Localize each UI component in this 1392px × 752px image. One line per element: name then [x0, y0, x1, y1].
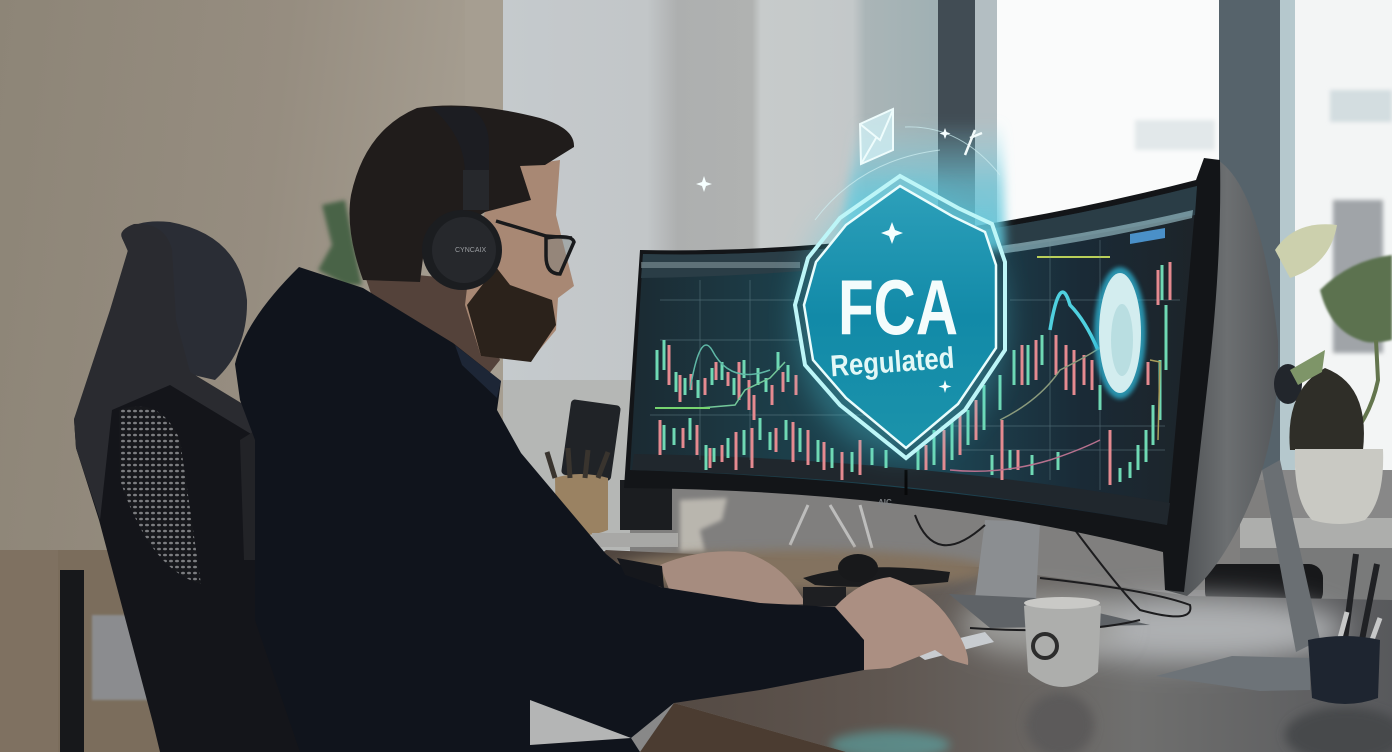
lower wall under monitor — [630, 480, 1270, 590]
badge: FCA Regulated — [795, 176, 1005, 458]
monitor frame — [624, 158, 1220, 592]
floor visible under arm — [530, 700, 631, 745]
desk — [540, 550, 1392, 752]
holographic globe — [1094, 267, 1146, 399]
chair — [74, 221, 310, 752]
monitor knob — [1274, 364, 1302, 404]
monitor logo: AIC — [878, 498, 892, 507]
man: hands on keyboard — [660, 551, 994, 670]
secondary monitor stand and base — [1156, 460, 1320, 691]
badge subheading: Regulated — [829, 342, 955, 383]
desk shelf left — [0, 550, 175, 752]
monitor stand — [803, 515, 1190, 630]
plant on sill — [1275, 224, 1392, 524]
holographic orbit arcs and sparkles — [696, 127, 1000, 393]
chart grid — [650, 240, 1180, 490]
panel: right candlesticks — [918, 262, 1170, 485]
monitor rear shell — [1165, 160, 1278, 596]
man: neck — [363, 270, 500, 385]
icon: holographic envelope — [860, 109, 893, 164]
man: glasses — [496, 221, 574, 274]
screen with trading charts — [630, 186, 1197, 525]
background wall — [0, 0, 940, 752]
mug — [1024, 597, 1101, 687]
hologram glow — [840, 120, 1005, 250]
panel: left candlesticks — [657, 340, 886, 480]
desk front edge — [640, 703, 846, 752]
badge heading: FCA — [838, 263, 958, 351]
desk lighting — [610, 550, 1392, 752]
window with frames — [938, 0, 1392, 470]
man: head — [350, 106, 574, 362]
headphone brand: CYNCAIX — [455, 247, 486, 254]
man: hoodie and arm — [235, 267, 864, 752]
plant behind man — [318, 200, 362, 285]
windowsill — [1205, 518, 1392, 606]
pen cup — [1308, 554, 1380, 704]
desk items: pen holder and frame — [547, 399, 872, 552]
man: headphones — [422, 107, 502, 290]
